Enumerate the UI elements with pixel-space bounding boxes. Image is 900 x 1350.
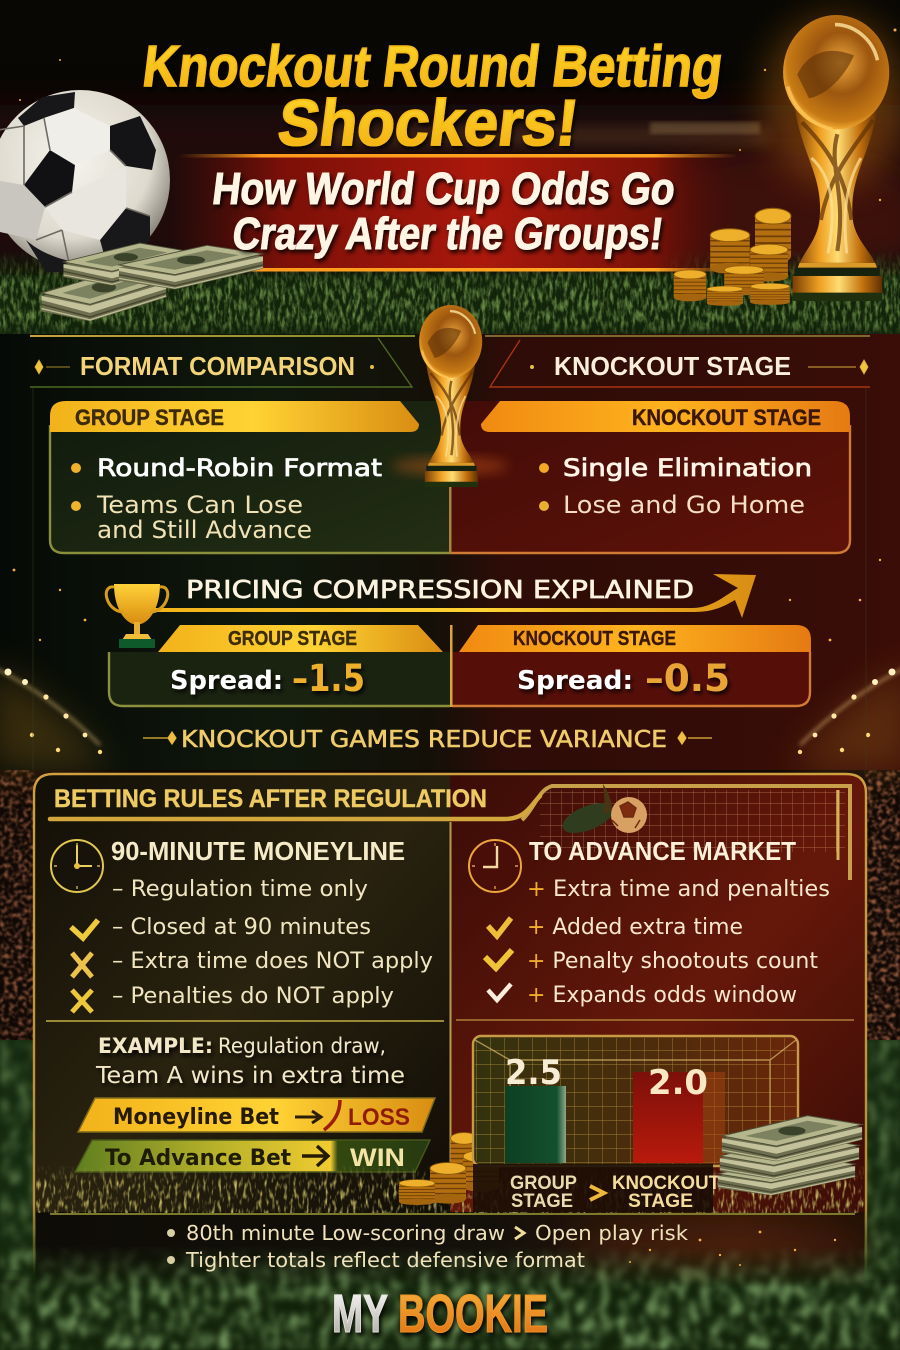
heading: pricing compression bbox=[150, 574, 756, 618]
ribbon: to advance bet win bbox=[75, 1140, 430, 1172]
icon: boot and ball bbox=[558, 784, 647, 839]
notes list: Tighter totals reflect defensive format bbox=[185, 1248, 585, 1272]
stat: group spread: –1.5 bbox=[292, 657, 365, 700]
rule list right bbox=[527, 877, 830, 1008]
rule list left: – Regulation time only bbox=[112, 877, 368, 902]
ribbon: group stage: GROUP STAGE bbox=[75, 405, 224, 430]
bullet list: group stage: and Still Advance bbox=[97, 516, 312, 544]
panel: betting rules bbox=[34, 774, 866, 1275]
icon: world cup trophy large bbox=[763, 15, 900, 301]
icon: clock left bbox=[51, 840, 103, 892]
heading: moneyline: 90-MINUTE MONEYLINE bbox=[111, 836, 405, 866]
example text: Regulation draw, bbox=[218, 1034, 386, 1058]
ribbon: to advance bet win: To Advance Bet bbox=[105, 1146, 291, 1171]
example text: EXAMPLE: bbox=[98, 1034, 213, 1058]
panel left: group spread bbox=[108, 625, 450, 707]
bullet list: knockout stage: Lose and Go Home bbox=[563, 491, 805, 519]
bullet list: group stage: Teams Can Lose bbox=[96, 491, 303, 519]
ribbon: knockout stage bbox=[481, 401, 850, 432]
stat: group spread: Spread: bbox=[170, 666, 283, 696]
rule list right: + Expands odds window bbox=[527, 983, 797, 1008]
stat: knockout spread: Spread: bbox=[517, 666, 633, 696]
icon: cash stack right bbox=[718, 1116, 862, 1195]
notes list bbox=[167, 1221, 688, 1272]
notes list: 80th minute Low-scoring draw bbox=[186, 1221, 505, 1245]
ribbon: moneyline bet loss: Moneyline Bet bbox=[113, 1105, 279, 1130]
bullet list: group stage: Round-Robin Format bbox=[97, 454, 382, 482]
bar: knockout stage 2.0: 2.0 bbox=[648, 1063, 708, 1103]
heading: format comparison: FORMAT COMPARISON bbox=[80, 351, 355, 381]
arrow: pricing bbox=[150, 574, 756, 618]
icon: gold coins top right bbox=[674, 208, 791, 306]
icon: check 2 bbox=[485, 950, 512, 968]
chart labels: STAGE bbox=[511, 1191, 573, 1212]
stat: knockout spread bbox=[517, 657, 730, 700]
column: to advance market bbox=[469, 836, 830, 1008]
logo: mybookie bbox=[332, 1284, 548, 1344]
rule list right: + Penalty shootouts count bbox=[527, 949, 818, 974]
stadium lights: right bbox=[790, 665, 900, 770]
bar: group stage 2.5 bbox=[505, 1053, 566, 1163]
icon: cash stacks left bbox=[41, 243, 263, 321]
bullet list: knockout stage bbox=[539, 454, 812, 519]
section header lines bbox=[30, 335, 870, 770]
bullet list: knockout stage: Single Elimination bbox=[563, 454, 812, 482]
grass strip bbox=[36, 1165, 864, 1213]
ribbon: moneyline bet loss: LOSS bbox=[348, 1104, 410, 1131]
bar: knockout stage 2.0 bbox=[633, 1063, 725, 1163]
icon: clock right bbox=[469, 840, 521, 892]
heading: to advance: TO ADVANCE MARKET bbox=[529, 836, 796, 866]
ribbon: group stage spread bbox=[158, 625, 443, 652]
chart labels: KNOCKOUT bbox=[612, 1173, 720, 1194]
icon: cross 2 bbox=[72, 990, 92, 1012]
bullet list: group stage bbox=[71, 454, 382, 544]
chart: goal bar chart bbox=[473, 1036, 798, 1212]
column: 90-minute moneyline bbox=[51, 836, 433, 1012]
bar: group stage 2.5: 2.5 bbox=[505, 1053, 562, 1093]
ribbon: group stage bbox=[50, 401, 419, 432]
ribbon: group stage spread: GROUP STAGE bbox=[228, 628, 357, 650]
stadium lights: left bbox=[0, 665, 110, 770]
stat: knockout spread: –0.5 bbox=[645, 657, 730, 700]
rule list left bbox=[112, 877, 433, 1009]
ribbon: moneyline bet loss bbox=[78, 1098, 435, 1132]
rule list left: – Penalties do NOT apply bbox=[112, 984, 394, 1009]
ribbon: knockout stage spread bbox=[459, 625, 811, 652]
icon: goal net bbox=[522, 786, 850, 880]
heading: betting rules after regulation: BETTING RULES AFTER REGULATION bbox=[54, 785, 487, 813]
icon: soccer ball bbox=[0, 90, 170, 272]
chart labels: GROUP bbox=[510, 1173, 577, 1194]
panel: spread comparison bbox=[108, 625, 811, 707]
example text bbox=[95, 1034, 405, 1089]
title line 1: Knockout Round Betting bbox=[139, 34, 726, 99]
chart labels: STAGE bbox=[628, 1191, 693, 1212]
rule list right: + Extra time and penalties bbox=[527, 877, 830, 902]
heading: knockout stage: KNOCKOUT STAGE bbox=[554, 351, 791, 381]
ribbon: knockout stage spread: KNOCKOUT STAGE bbox=[513, 628, 676, 650]
subtitle line 1: How World Cup Odds Go bbox=[210, 163, 678, 214]
icon: check 1 bbox=[488, 918, 511, 936]
ribbon: to advance bet win: WIN bbox=[350, 1144, 405, 1172]
panel left: group stage bbox=[50, 401, 450, 554]
example text: Team A wins in extra time bbox=[95, 1063, 405, 1089]
chart labels bbox=[510, 1173, 720, 1212]
panel right: knockout spread bbox=[452, 625, 811, 707]
notes list: Open play risk bbox=[535, 1221, 688, 1245]
red title banner bbox=[170, 154, 740, 272]
icon: gold coins bottom bbox=[399, 1133, 499, 1205]
icon: world cup trophy center bbox=[392, 305, 508, 487]
panel: format comparison bbox=[50, 401, 850, 554]
icon: check bbox=[71, 920, 98, 938]
heading: pricing compression: PRICING COMPRESSION EXPLAINED bbox=[186, 575, 694, 604]
icon: cross 1 bbox=[72, 953, 92, 977]
rule list left: – Extra time does NOT apply bbox=[112, 949, 433, 974]
rule list left: – Closed at 90 minutes bbox=[112, 915, 371, 940]
title line 2: Shockers! bbox=[274, 86, 582, 159]
stat: group spread bbox=[170, 657, 365, 700]
subtitle line 2: Crazy After the Groups! bbox=[230, 208, 666, 259]
ribbon: knockout stage: KNOCKOUT STAGE bbox=[632, 405, 821, 430]
logo: mybookie: MY bbox=[332, 1284, 388, 1344]
main title bbox=[139, 34, 726, 259]
logo: mybookie: BOOKIE bbox=[398, 1284, 548, 1344]
callout: knockout games reduce variance: KNOCKOUT GAMES REDUCE VARIANCE bbox=[181, 727, 667, 753]
icon: check 3 bbox=[488, 984, 511, 1000]
rule list right: + Added extra time bbox=[527, 915, 743, 940]
panel right: knockout stage bbox=[450, 401, 850, 554]
icon: gold cup bbox=[106, 584, 168, 648]
